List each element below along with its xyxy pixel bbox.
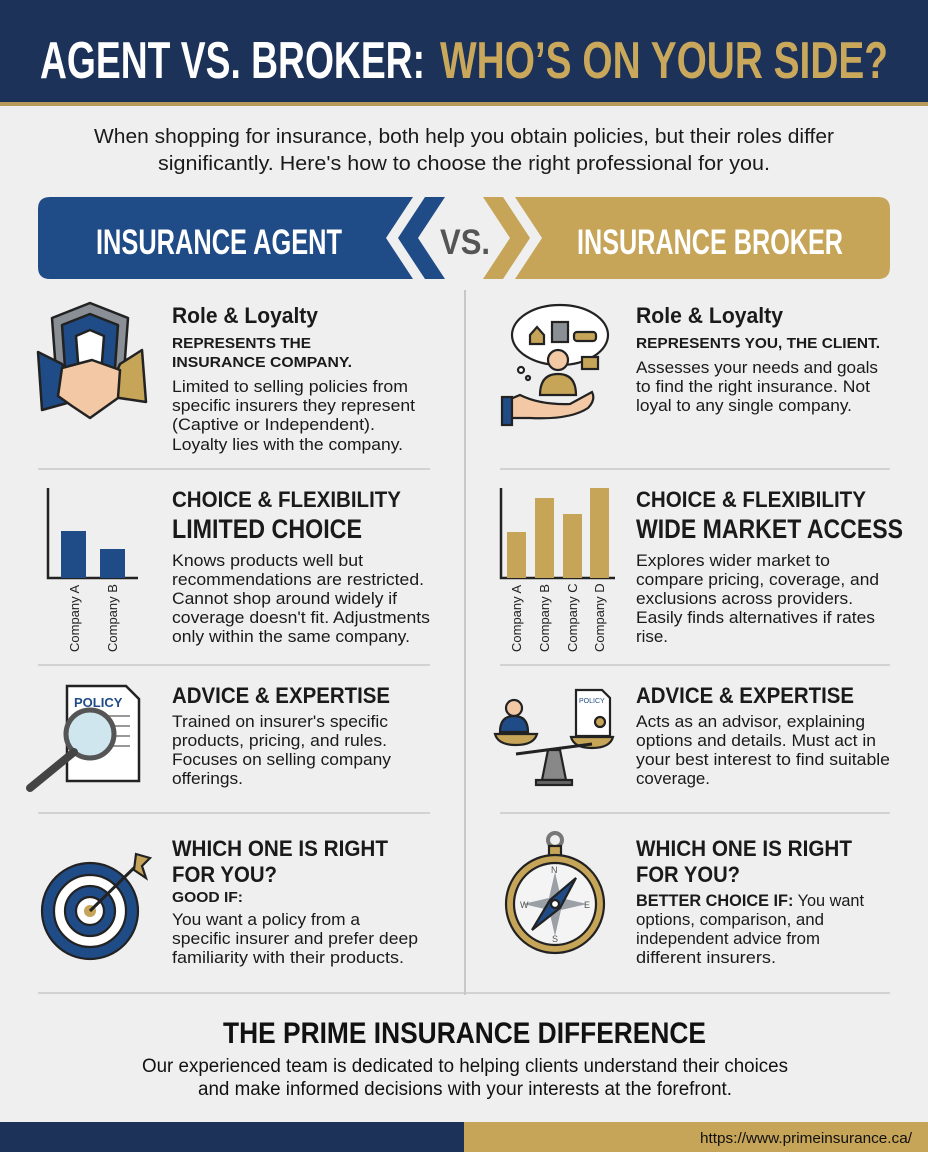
banner: agent vs broker: VS. [440,223,490,262]
text: agent role & loyalty [172,303,415,454]
icon: shield handshake [38,303,146,418]
text: agent which one: You want a policy from a [172,910,361,929]
intro text [94,126,834,175]
text: broker role & loyalty: to find the right insurance. Not [636,377,870,396]
text: broker which one [636,836,864,967]
text: broker which one: options, comparison, and [636,910,824,929]
text: agent advice: Focuses on selling company [172,750,391,769]
banner: agent vs broker: INSURANCE AGENT [96,223,342,262]
chart: broker wide market: Company D [592,583,607,652]
text: broker choice & flexibility: compare pricing, coverage, and [636,570,879,589]
banner: agent vs broker [38,197,890,279]
bottom bar with url: https://www.primeinsurance.ca/ [700,1130,913,1147]
text: agent which one [172,836,418,967]
chart: broker wide market: Company B [537,584,552,652]
text: broker role & loyalty: Role & Loyalty [636,303,784,328]
text: agent role & loyalty: (Captive or Independent). [172,415,375,434]
text: broker choice & flexibility: CHOICE & FLEXIBILITY [636,487,866,512]
text: broker which one: BETTER CHOICE IF: You want [636,892,864,910]
text: broker choice & flexibility: exclusions across providers. [636,589,853,608]
icon: scale with advisor and document: POLICY [579,698,605,705]
text: agent advice: products, pricing, and rules. [172,731,387,750]
icon: policy magnifier: POLICY [74,695,123,710]
text: agent role & loyalty: Loyalty lies with the company. [172,435,403,454]
text: agent choice & flexibility: recommendations are restricted. [172,570,424,589]
text: agent advice: ADVICE & EXPERTISE [172,683,390,708]
text: broker choice & flexibility: Explores wider market to [636,551,830,570]
chart: agent limited choice: Company B [105,584,120,652]
text: agent which one: GOOD IF: [172,889,243,906]
text: agent role & loyalty: INSURANCE COMPANY. [172,354,352,371]
chart: agent limited choice: Company A [67,584,82,652]
chart: broker wide market [501,488,615,652]
text: agent which one: FOR YOU? [172,862,277,887]
text: broker choice & flexibility [636,487,903,646]
text: broker which one: independent advice from [636,929,820,948]
icon: compass: S [552,934,558,944]
text: broker which one: different insurers. [636,948,776,967]
text: broker advice [636,683,890,788]
text: agent advice: offerings. [172,769,243,788]
icon: compass: W [520,900,529,910]
icon: policy magnifier [30,686,139,788]
footer text: Our experienced team is dedicated to helping clients understand their choices [142,1056,788,1077]
text: broker role & loyalty: Assesses your needs and goals [636,358,878,377]
title [40,32,888,90]
text: agent choice & flexibility: Knows products well but [172,551,363,570]
icon: scale with advisor and document [495,690,613,785]
icon: target with arrow [42,854,150,959]
text: broker which one: FOR YOU? [636,862,740,887]
bottom bar with url [0,1122,928,1152]
text: broker advice: your best interest to find suitable [636,750,890,769]
text: broker which one: WHICH ONE IS RIGHT [636,836,853,861]
footer text [142,1056,788,1100]
text: broker advice: coverage. [636,769,710,788]
text: agent which one: WHICH ONE IS RIGHT [172,836,389,861]
title: AGENT VS. BROKER: [40,32,425,90]
text: broker advice: options and details. Must act in [636,731,876,750]
text: agent advice [172,683,391,788]
text: broker role & loyalty [636,303,880,415]
text: agent which one: specific insurer and prefer deep [172,929,418,948]
text: agent role & loyalty: Role & Loyalty [172,303,319,328]
text: agent choice & flexibility [172,487,430,646]
footer text: and make informed decisions with your interests at the forefront. [198,1079,732,1100]
text: broker advice: Acts as an advisor, explaining [636,712,865,731]
text: broker choice & flexibility: Easily finds alternatives if rates [636,608,875,627]
text: broker advice: ADVICE & EXPERTISE [636,683,854,708]
text: agent which one: familiarity with their products. [172,948,404,967]
footer heading: THE PRIME INSURANCE DIFFERENCE [223,1017,706,1050]
text: agent choice & flexibility: CHOICE & FLEXIBILITY [172,487,401,512]
text: broker role & loyalty: REPRESENTS YOU, THE CLIENT. [636,335,880,352]
header bar [0,0,928,106]
text: agent role & loyalty: Limited to selling policies from [172,377,408,396]
intro text: significantly. Here's how to choose the right professional for you. [158,153,770,175]
text: agent advice: Trained on insurer's specific [172,712,389,731]
text: broker choice & flexibility: rise. [636,627,668,646]
text: broker role & loyalty: loyal to any single company. [636,396,852,415]
text: agent choice & flexibility: only within the same company. [172,627,410,646]
text: agent role & loyalty: specific insurers they represent [172,396,415,415]
chart: broker wide market: Company A [509,584,524,652]
text: agent choice & flexibility: Cannot shop around widely if [172,589,397,608]
text: agent choice & flexibility: LIMITED CHOICE [172,514,362,544]
icon: thought bubble client hand [502,305,608,425]
text: agent choice & flexibility: coverage doesn't fit. Adjustments [172,608,430,627]
text: agent role & loyalty: REPRESENTS THE [172,335,311,352]
chart: broker wide market: Company C [565,583,580,652]
icon: compass: N [551,865,558,875]
chart: agent limited choice [48,488,138,652]
intro text: When shopping for insurance, both help you obtain policies, but their roles differ [94,126,834,148]
icon: compass [506,833,604,953]
icon: compass: E [584,900,590,910]
